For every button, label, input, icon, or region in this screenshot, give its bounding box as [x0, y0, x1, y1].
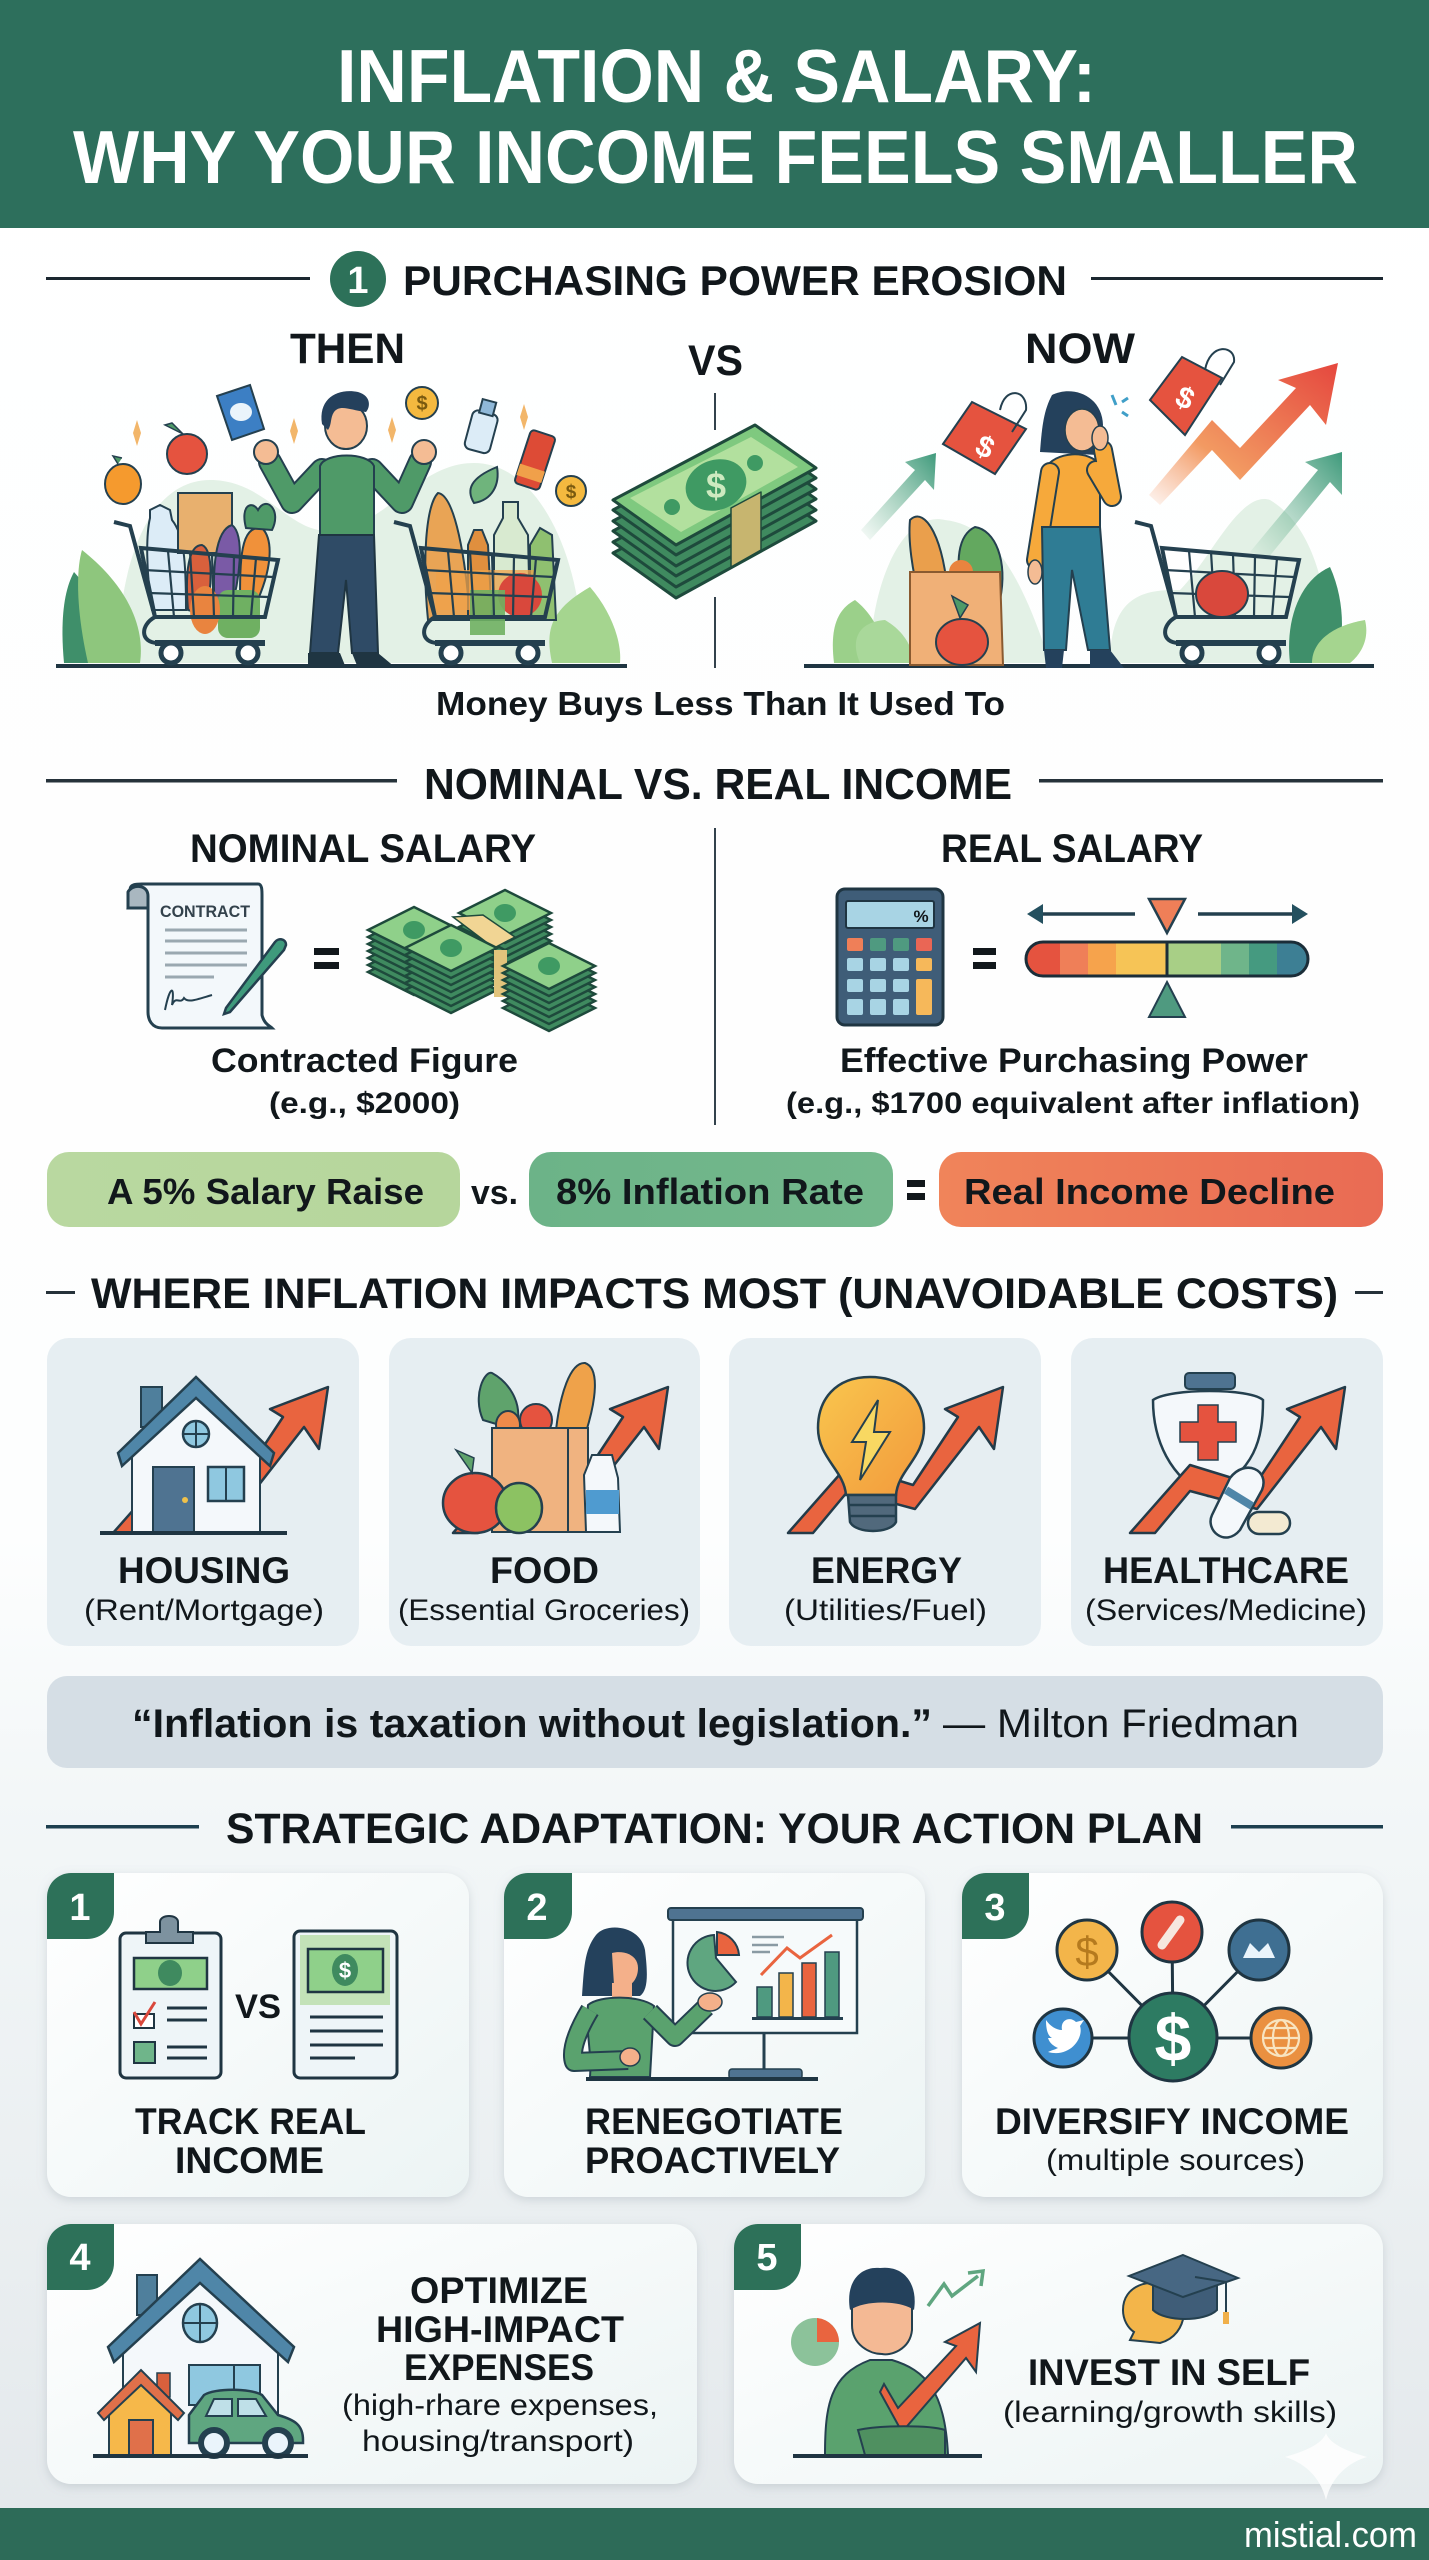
- panel: housing: (Rent/Mortgage): [84, 1594, 324, 1627]
- vs text: vs.: [471, 1174, 518, 1212]
- badge 2: 2: [526, 1887, 548, 1929]
- icon: income network: $: [1155, 2001, 1191, 2075]
- quote banner: — Milton Friedman: [943, 1702, 1299, 1746]
- panel: step 4 optimize expenses: EXPENSES: [404, 2347, 594, 2388]
- icon: shield and pills: [1153, 1373, 1263, 1496]
- pill: inflation rate: [529, 1152, 893, 1227]
- section heading: nominal vs real: NOMINAL VS. REAL INCOME: [424, 760, 1012, 809]
- panel: healthcare: HEALTHCARE: [1103, 1550, 1349, 1591]
- icon: paycheck document: $: [339, 1958, 351, 1983]
- man: [254, 391, 436, 668]
- illustration: now scene: [804, 349, 1374, 668]
- header banner: [0, 0, 1429, 228]
- equals sign: [314, 948, 339, 969]
- icon: stacks of cash: [368, 890, 595, 1031]
- panel: step 2 renegotiate: [504, 1873, 925, 2197]
- cart left contents: [147, 493, 275, 638]
- watermark sparkle: [1285, 2433, 1367, 2500]
- icon: income network: [1034, 1902, 1311, 2081]
- panel: step 4 optimize expenses: HIGH-IMPACT: [376, 2309, 624, 2350]
- badge 4: [47, 2224, 114, 2290]
- floating groceries: $: [566, 482, 577, 503]
- badge 5: 5: [756, 2237, 778, 2279]
- effective purchasing power caption: [786, 1042, 1360, 1120]
- then label: THEN: [290, 325, 405, 373]
- icon: contract: [128, 884, 286, 1028]
- panel: step 5 invest in self: [734, 2224, 1383, 2484]
- icon: graduation cap: [1123, 2255, 1238, 2343]
- icon: capsule: [1211, 1468, 1290, 1538]
- header banner: WHY YOUR INCOME FEELS SMALLER: [73, 115, 1358, 199]
- pill: real income decline: Real Income Decline: [964, 1171, 1335, 1212]
- now label: NOW: [1025, 325, 1135, 373]
- price tags: $: [1170, 380, 1200, 417]
- badge 1: 1: [69, 1887, 91, 1929]
- panel: energy: (Utilities/Fuel): [784, 1594, 987, 1627]
- panel: step 3 diversify income: DIVERSIFY INCOME: [995, 2101, 1349, 2142]
- badge 3: [962, 1873, 1029, 1939]
- panel: step 2 renegotiate: RENEGOTIATE: [585, 2101, 843, 2142]
- icon: paycheck document: [294, 1931, 397, 2078]
- badge 3: 3: [984, 1887, 1006, 1929]
- header banner: INFLATION & SALARY:: [337, 34, 1096, 118]
- pill: salary raise: [47, 1152, 460, 1227]
- panel: step 4 optimize expenses: housing/transport): [362, 2425, 634, 2458]
- icon: calculator: [837, 889, 943, 1025]
- icon: presenter at chart: [573, 1908, 863, 2081]
- illustration: money stack: [613, 425, 816, 598]
- icon: house: [100, 1377, 287, 1535]
- panel: step 4 optimize expenses: OPTIMIZE: [410, 2270, 588, 2311]
- pill: real income decline: [939, 1152, 1383, 1227]
- panel: food: [389, 1338, 700, 1646]
- panel: housing: [47, 1338, 359, 1646]
- panel: step 3 diversify income: [962, 1873, 1383, 2197]
- panel: step 5 invest in self: (learning/growth skills): [1003, 2396, 1337, 2429]
- icon: calculator: %: [913, 907, 929, 926]
- section heading: nominal vs real: [46, 760, 1383, 809]
- illustration: money stack: $: [706, 465, 726, 506]
- panel: step 4 optimize expenses: (high-rhare expenses,: [342, 2389, 658, 2422]
- section heading: purchasing power erosion: 1: [347, 260, 369, 302]
- panel: step 1 track real income: TRACK REAL: [135, 2101, 366, 2142]
- pill: salary raise: A 5% Salary Raise: [107, 1171, 424, 1212]
- footer bar: [0, 2508, 1429, 2560]
- panel: food: FOOD: [490, 1550, 599, 1591]
- effective purchasing power caption: (e.g., $1700 equivalent after inflation): [786, 1087, 1360, 1120]
- icon: grocery bag: [443, 1363, 620, 1533]
- price tags: $: [970, 429, 1000, 466]
- panel: energy: ENERGY: [811, 1550, 962, 1591]
- effective purchasing power caption: Effective Purchasing Power: [840, 1042, 1308, 1080]
- gauge: inflation meter: [1026, 899, 1308, 1017]
- section heading: action plan: STRATEGIC ADAPTATION: YOUR ACTION PLAN: [226, 1805, 1203, 1853]
- equals sign: [907, 1180, 925, 1200]
- panel: step 1 track real income: [47, 1873, 469, 2197]
- apple in cart: [1196, 571, 1248, 617]
- quote banner: [47, 1676, 1383, 1768]
- contracted figure caption: [211, 1042, 518, 1120]
- section heading: purchasing power erosion: PURCHASING POWER EROSION: [403, 257, 1067, 304]
- panel: step 3 diversify income: (multiple sources): [1046, 2144, 1305, 2177]
- nominal salary heading: NOMINAL SALARY: [190, 827, 536, 871]
- badge 5: [734, 2224, 801, 2290]
- badge 4: 4: [69, 2237, 91, 2279]
- section heading: where inflation impacts most: WHERE INFLATION IMPACTS MOST (UNAVOIDABLE COSTS): [91, 1270, 1338, 1318]
- section heading: purchasing power erosion: [46, 251, 1383, 307]
- quote banner: “Inflation is taxation without legislation.”: [132, 1702, 932, 1746]
- column divider: [714, 828, 716, 1125]
- floating groceries: [105, 385, 586, 506]
- panel: healthcare: [1071, 1338, 1383, 1646]
- vs label: VS: [235, 1988, 281, 2026]
- panel: step 5 invest in self: INVEST IN SELF: [1028, 2352, 1310, 2393]
- caption: money buys less: Money Buys Less Than It Used To: [436, 685, 1005, 722]
- cart right contents: [425, 493, 556, 635]
- illustration: then scene: [56, 385, 627, 668]
- bag of groceries: [909, 517, 1003, 665]
- panel: energy: [729, 1338, 1041, 1646]
- woman: [1028, 391, 1128, 668]
- equals sign: [973, 948, 996, 969]
- icon: income network: $: [1075, 1928, 1099, 1975]
- rising arrows: [861, 363, 1342, 558]
- floating groceries: $: [416, 393, 428, 415]
- center divider: [714, 393, 716, 668]
- badge 2: [504, 1873, 572, 1939]
- icon: light bulb: [818, 1377, 924, 1531]
- contracted figure caption: (e.g., $2000): [269, 1087, 460, 1120]
- panel: housing: HOUSING: [118, 1550, 290, 1591]
- panel: step 2 renegotiate: PROACTIVELY: [585, 2140, 840, 2181]
- contracted figure caption: Contracted Figure: [211, 1042, 518, 1080]
- real salary heading: REAL SALARY: [941, 827, 1203, 871]
- icon: contract: CONTRACT: [160, 902, 251, 921]
- price tags: [943, 349, 1234, 474]
- vs label: VS: [688, 337, 743, 385]
- icon: house and car: [93, 2259, 308, 2458]
- panel: step 1 track real income: INCOME: [175, 2140, 324, 2181]
- panel: step 4 optimize expenses: [47, 2224, 697, 2484]
- panel: food: (Essential Groceries): [398, 1594, 690, 1627]
- icon: person with growth arrow: [791, 2268, 983, 2458]
- badge 1: [47, 1873, 114, 1939]
- pill: inflation rate: 8% Inflation Rate: [556, 1171, 864, 1212]
- icon: clipboard: [120, 1916, 221, 2078]
- panel: healthcare: (Services/Medicine): [1085, 1594, 1367, 1627]
- footer bar: mistial.com: [1244, 2514, 1417, 2555]
